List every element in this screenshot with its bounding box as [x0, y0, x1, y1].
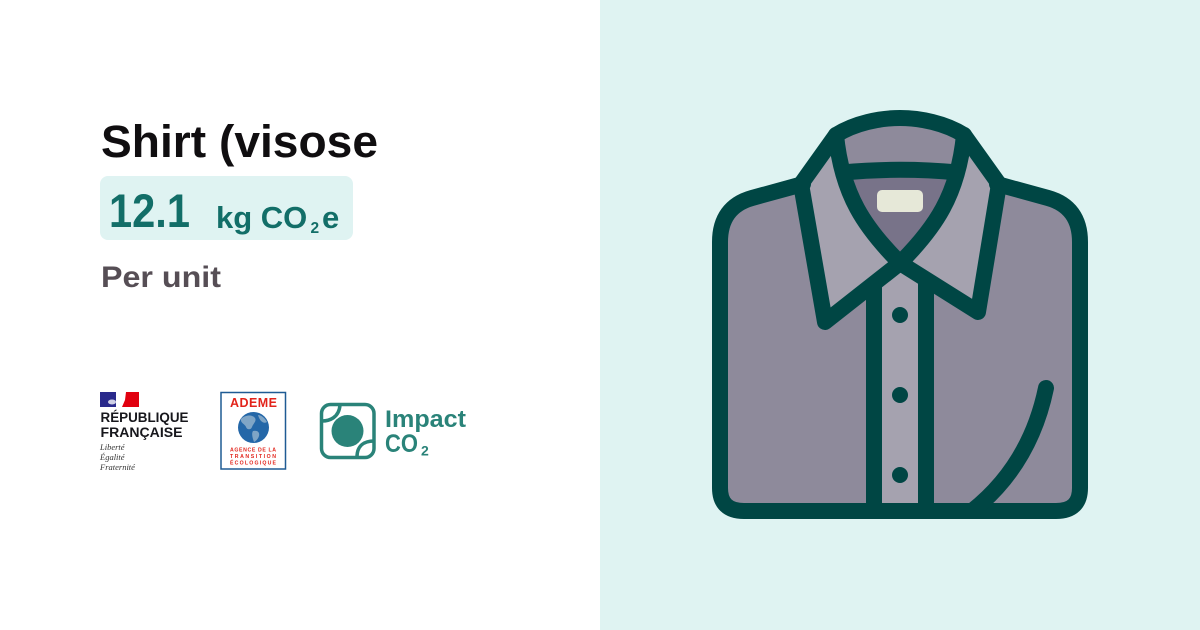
panel: illustration background — [600, 0, 1200, 630]
neck label — [877, 190, 923, 212]
icon: French flag — [100, 392, 139, 407]
value unit: kg CO — [216, 200, 307, 235]
buttons — [892, 307, 908, 483]
logo: Impact CO2: CO — [385, 430, 418, 458]
collar back — [836, 118, 964, 172]
title: Shirt (visose — [101, 116, 378, 167]
logo: Impact CO2 — [322, 404, 466, 458]
logo: République Française — [99, 392, 188, 472]
value unit: e — [322, 200, 339, 235]
ADEME tagline — [230, 448, 277, 466]
logo: République Française: FRANÇAISE — [100, 425, 182, 440]
shirt outlines — [720, 118, 1080, 511]
value badge — [100, 176, 353, 240]
inner neck — [842, 170, 958, 263]
ADEME tagline: ÉCOLOGIQUE — [230, 458, 277, 466]
icon: Impact CO2 mark — [322, 404, 374, 458]
wordmark: Impact — [385, 406, 466, 433]
icon: globe — [238, 412, 269, 443]
ADEME tagline: TRANSITION — [230, 454, 276, 460]
left collar flap — [801, 135, 900, 322]
placket — [874, 268, 926, 505]
motto — [99, 442, 136, 472]
ADEME wordmark: ADEME — [230, 396, 277, 410]
motto: Fraternité — [99, 462, 136, 472]
logo: Impact CO2: 2 — [421, 442, 429, 458]
wordmark: RÉPUBLIQUE — [100, 410, 188, 425]
logo: ADEME — [221, 392, 286, 469]
value unit: 2 — [310, 220, 319, 237]
subtitle: per unit: Per unit — [101, 261, 221, 294]
ADEME tagline: AGENCE DE LA — [230, 448, 276, 454]
motto: Égalité — [99, 452, 126, 462]
value number: 12.1 — [109, 184, 190, 237]
shirt body — [720, 135, 1080, 511]
motto: Liberté — [99, 442, 126, 452]
icon: folded shirt — [720, 118, 1080, 511]
right collar flap — [900, 135, 999, 312]
